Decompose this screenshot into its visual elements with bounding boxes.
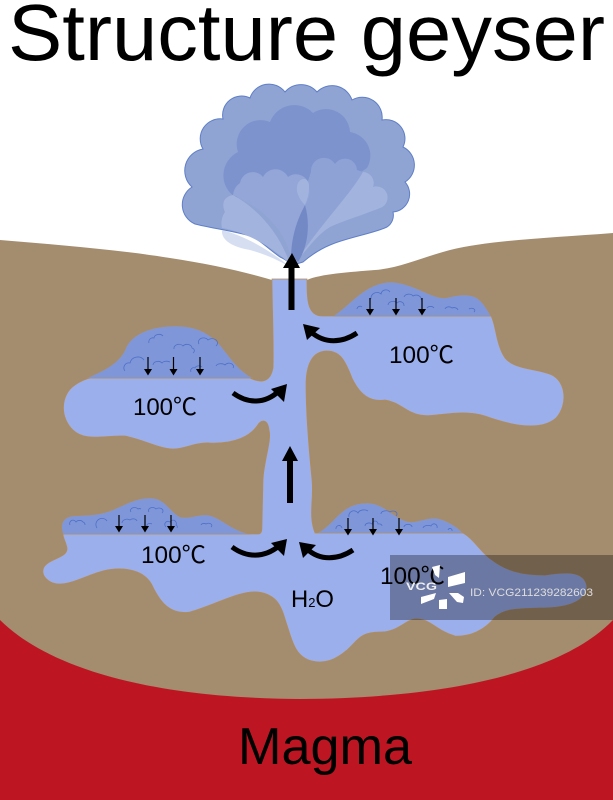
- arrow: lower right curved: [299, 542, 353, 558]
- faint left plume: [222, 230, 290, 267]
- label: lower left temperature: 100℃: [141, 542, 206, 569]
- ground: [0, 233, 613, 800]
- arrow: upper right curved: [303, 324, 357, 341]
- label: magma: Magma: [238, 718, 412, 776]
- small pale lobe: [297, 179, 309, 205]
- magma: [0, 620, 613, 800]
- watermark: ID: VCG211239282603: [470, 587, 593, 599]
- arrow: conduit up: [282, 446, 298, 503]
- arrow: vent up: [283, 253, 300, 310]
- steam cap: upper right chamber: [333, 282, 491, 316]
- inner darker cloud: [223, 105, 370, 200]
- steam cap: lower left chamber: [62, 498, 250, 534]
- label: upper right temperature: 100℃: [389, 342, 454, 369]
- arrow: middle left curved: [233, 384, 287, 402]
- geyser eruption cloud: [182, 84, 414, 267]
- label: water: H2O: [291, 586, 334, 613]
- left plume lobe: [221, 195, 290, 264]
- steam cap: lower right chamber: [317, 503, 463, 533]
- arrow: lower left curved: [232, 539, 287, 556]
- water chambers and conduit: [43, 279, 587, 662]
- label: lower right temperature: 100℃: [380, 563, 445, 590]
- central dark lens: [291, 205, 308, 262]
- small down arrows: [115, 298, 426, 536]
- steam cap: middle left chamber: [87, 326, 253, 378]
- label: middle left temperature: 100℃: [133, 394, 197, 421]
- outer steam cloud: [182, 84, 414, 265]
- central right plume: [296, 158, 363, 260]
- watermark: [390, 555, 613, 620]
- watermark: VCG: [406, 581, 437, 593]
- central left plume: [233, 169, 310, 258]
- right plume lobe: [296, 172, 388, 262]
